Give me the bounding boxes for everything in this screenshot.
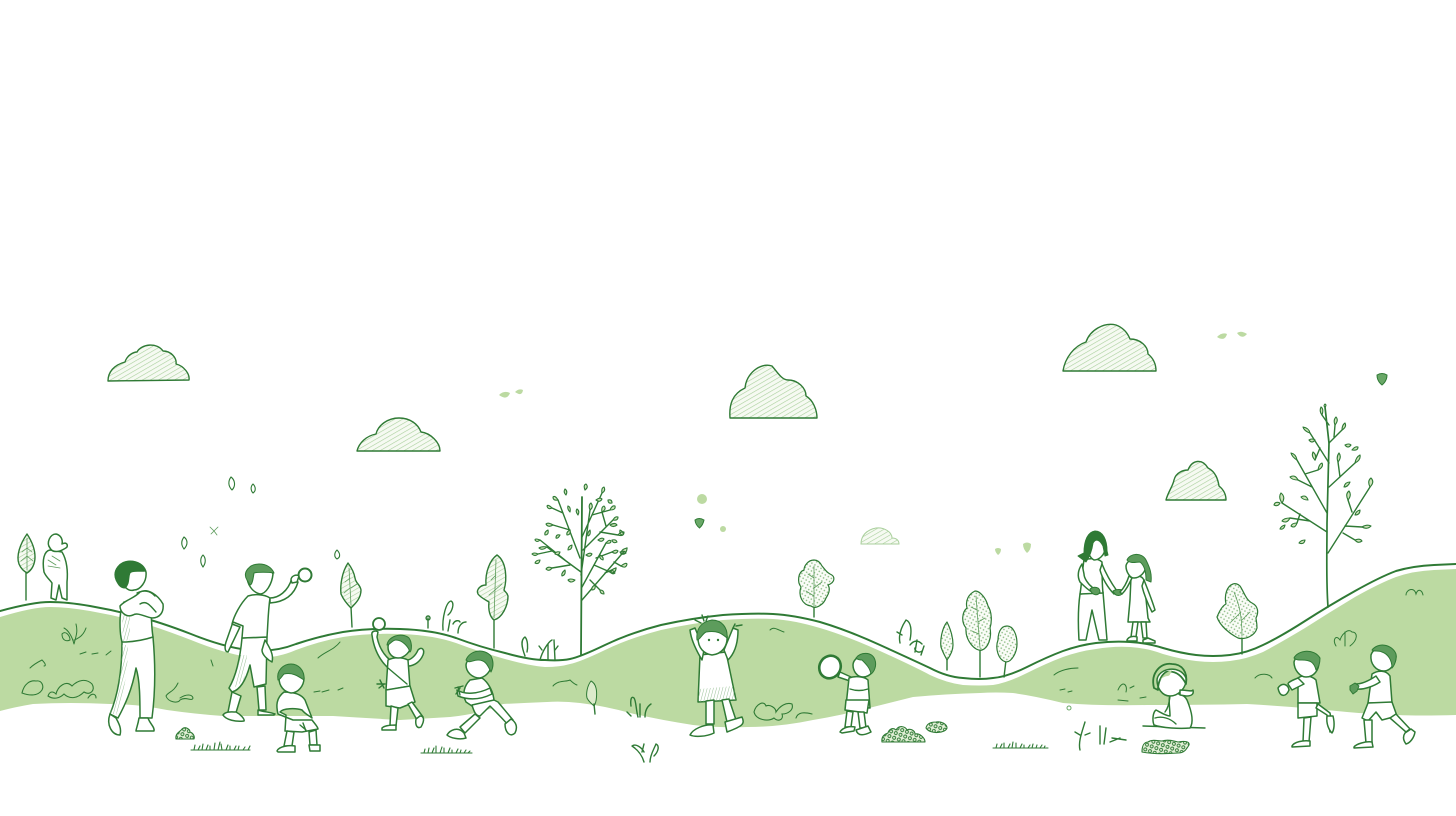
crouching child	[277, 664, 320, 752]
hill plants centre	[553, 628, 812, 720]
cloud 5	[1166, 461, 1226, 500]
tall sapling right	[1274, 404, 1373, 607]
hill ridge line	[0, 564, 1456, 679]
cloud 1	[108, 345, 189, 381]
leaf tree narrow	[941, 622, 953, 670]
girl with arms raised	[690, 615, 743, 736]
lobed tree	[477, 555, 508, 648]
oak tree centre	[799, 560, 834, 617]
seedlings on ridge	[426, 601, 558, 660]
small back-view child	[43, 534, 67, 600]
leaf tree near second adult	[341, 563, 361, 627]
child with hoop	[815, 652, 876, 735]
running boy with ball	[1278, 651, 1334, 747]
sitting girl	[1143, 664, 1205, 728]
adult with ring	[223, 564, 312, 721]
cloud 4	[1063, 324, 1156, 371]
tree small oval	[997, 626, 1017, 677]
cloud 3	[730, 365, 817, 418]
cloud 2	[357, 418, 440, 451]
woman holding hands with girl	[1078, 531, 1155, 643]
green hill band	[0, 569, 1456, 727]
hill shrubs left	[22, 624, 343, 702]
green floating leaves	[499, 332, 1387, 555]
large tree centre left	[532, 484, 627, 655]
ground bushes	[176, 722, 1189, 754]
oak tree right	[1217, 584, 1258, 654]
hill plants right	[1054, 589, 1423, 701]
child with ball	[372, 618, 424, 730]
ground grass tufts	[191, 742, 1048, 753]
running boy right	[1350, 645, 1415, 748]
adult with crossed arms	[109, 561, 163, 735]
leaf tree far left	[18, 534, 35, 600]
cloud 6: faint	[861, 528, 899, 544]
floating seeds	[182, 477, 340, 567]
tree tall oval	[963, 591, 991, 677]
running child left	[447, 651, 516, 739]
plant clump beside centre hill	[897, 620, 924, 655]
ground sprouts	[632, 706, 1126, 762]
